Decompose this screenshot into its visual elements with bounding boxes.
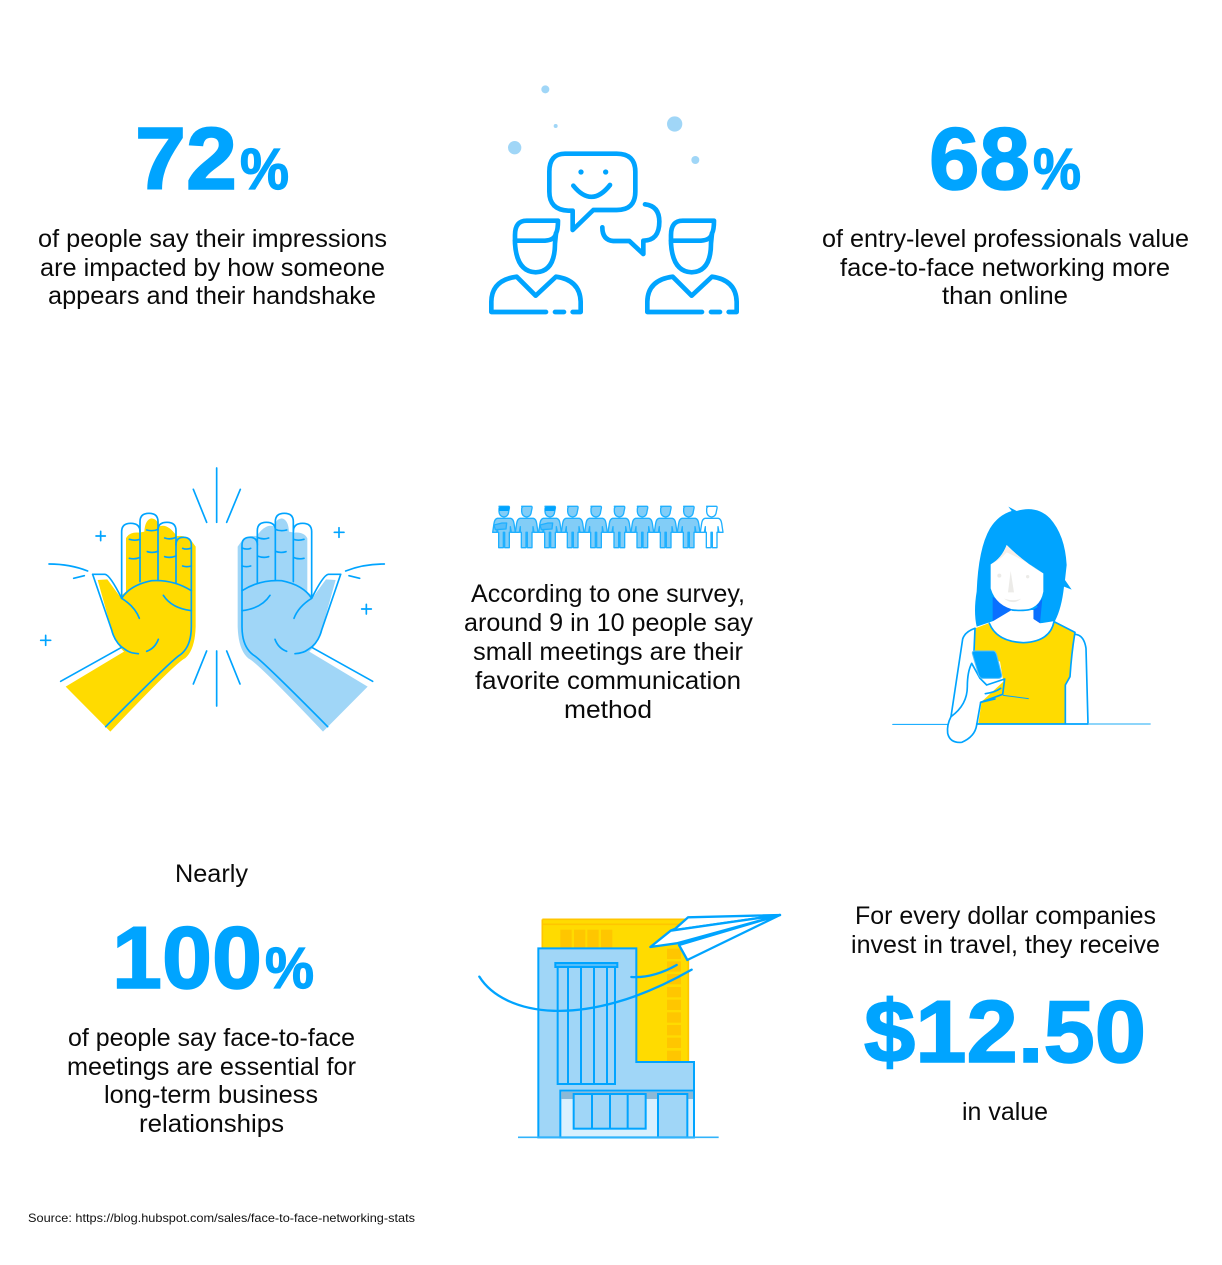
left yellow hand [49, 513, 196, 732]
stat block: $12.50 [851, 902, 1160, 1126]
pictogram: 9 in 10 people [493, 506, 723, 548]
stat block: 100% [67, 860, 356, 1138]
text: essential meetings: relationships [139, 1110, 284, 1138]
number: 72%: % [240, 137, 289, 202]
impact rays and plus signs [41, 468, 371, 706]
text: small meetings survey: favorite communication [475, 667, 741, 695]
text: entry-level professionals: of entry-level professionals value [822, 225, 1189, 253]
number: 100%: 100 [112, 908, 262, 1007]
text: in value: in value [962, 1098, 1048, 1126]
text: small meetings survey: around 9 in 10 people say [464, 609, 753, 637]
number: $12.50: $12.50 [864, 982, 1146, 1081]
text: impressions: appears and their handshake [48, 282, 376, 310]
icon: high five hands [41, 468, 384, 732]
paper plane and flight trail [479, 915, 780, 1011]
number: 100%: % [265, 936, 314, 1001]
text: small meetings survey [464, 580, 753, 724]
text: small meetings survey: method [564, 696, 652, 724]
number: 68%: 68 [929, 109, 1030, 208]
text: entry-level professionals: than online [942, 282, 1068, 310]
text: small meetings survey: small meetings are their [473, 638, 743, 666]
number: 68%: % [1033, 137, 1081, 202]
text: Nearly: Nearly [175, 860, 248, 888]
text: essential meetings: long-term business [104, 1081, 318, 1109]
stat block: 72% [38, 109, 387, 310]
text: entry-level professionals [822, 225, 1189, 310]
text: travel investment: invest in travel, they receive [851, 931, 1160, 959]
text: impressions [38, 225, 387, 310]
right blue hand [238, 513, 384, 732]
icon: two people chatting [491, 85, 737, 312]
text: essential meetings [67, 1024, 356, 1138]
icon: building with paper plane [479, 915, 780, 1137]
text: essential meetings: meetings are essential for [67, 1053, 356, 1081]
number: 68% [929, 109, 1081, 208]
number: 72%: 72 [135, 109, 237, 208]
text: travel investment [851, 902, 1160, 959]
number: 72% [135, 109, 289, 208]
blue front building [518, 948, 719, 1137]
text: small meetings survey: According to one survey, [471, 580, 745, 608]
text: essential meetings: of people say face-to-face [68, 1024, 355, 1052]
yellow back building [542, 919, 688, 1063]
source note: Source: https://blog.hubspot.com/sales/face-to-face-networking-stats [28, 1211, 415, 1225]
text: entry-level professionals: face-to-face networking more [840, 254, 1170, 282]
text: impressions: of people say their impressions [38, 225, 387, 253]
stat block: 68% [822, 109, 1189, 310]
text: impressions: are impacted by how someone [40, 254, 385, 282]
icon: woman looking at phone [893, 507, 1151, 742]
text: travel investment: For every dollar companies [855, 902, 1156, 930]
